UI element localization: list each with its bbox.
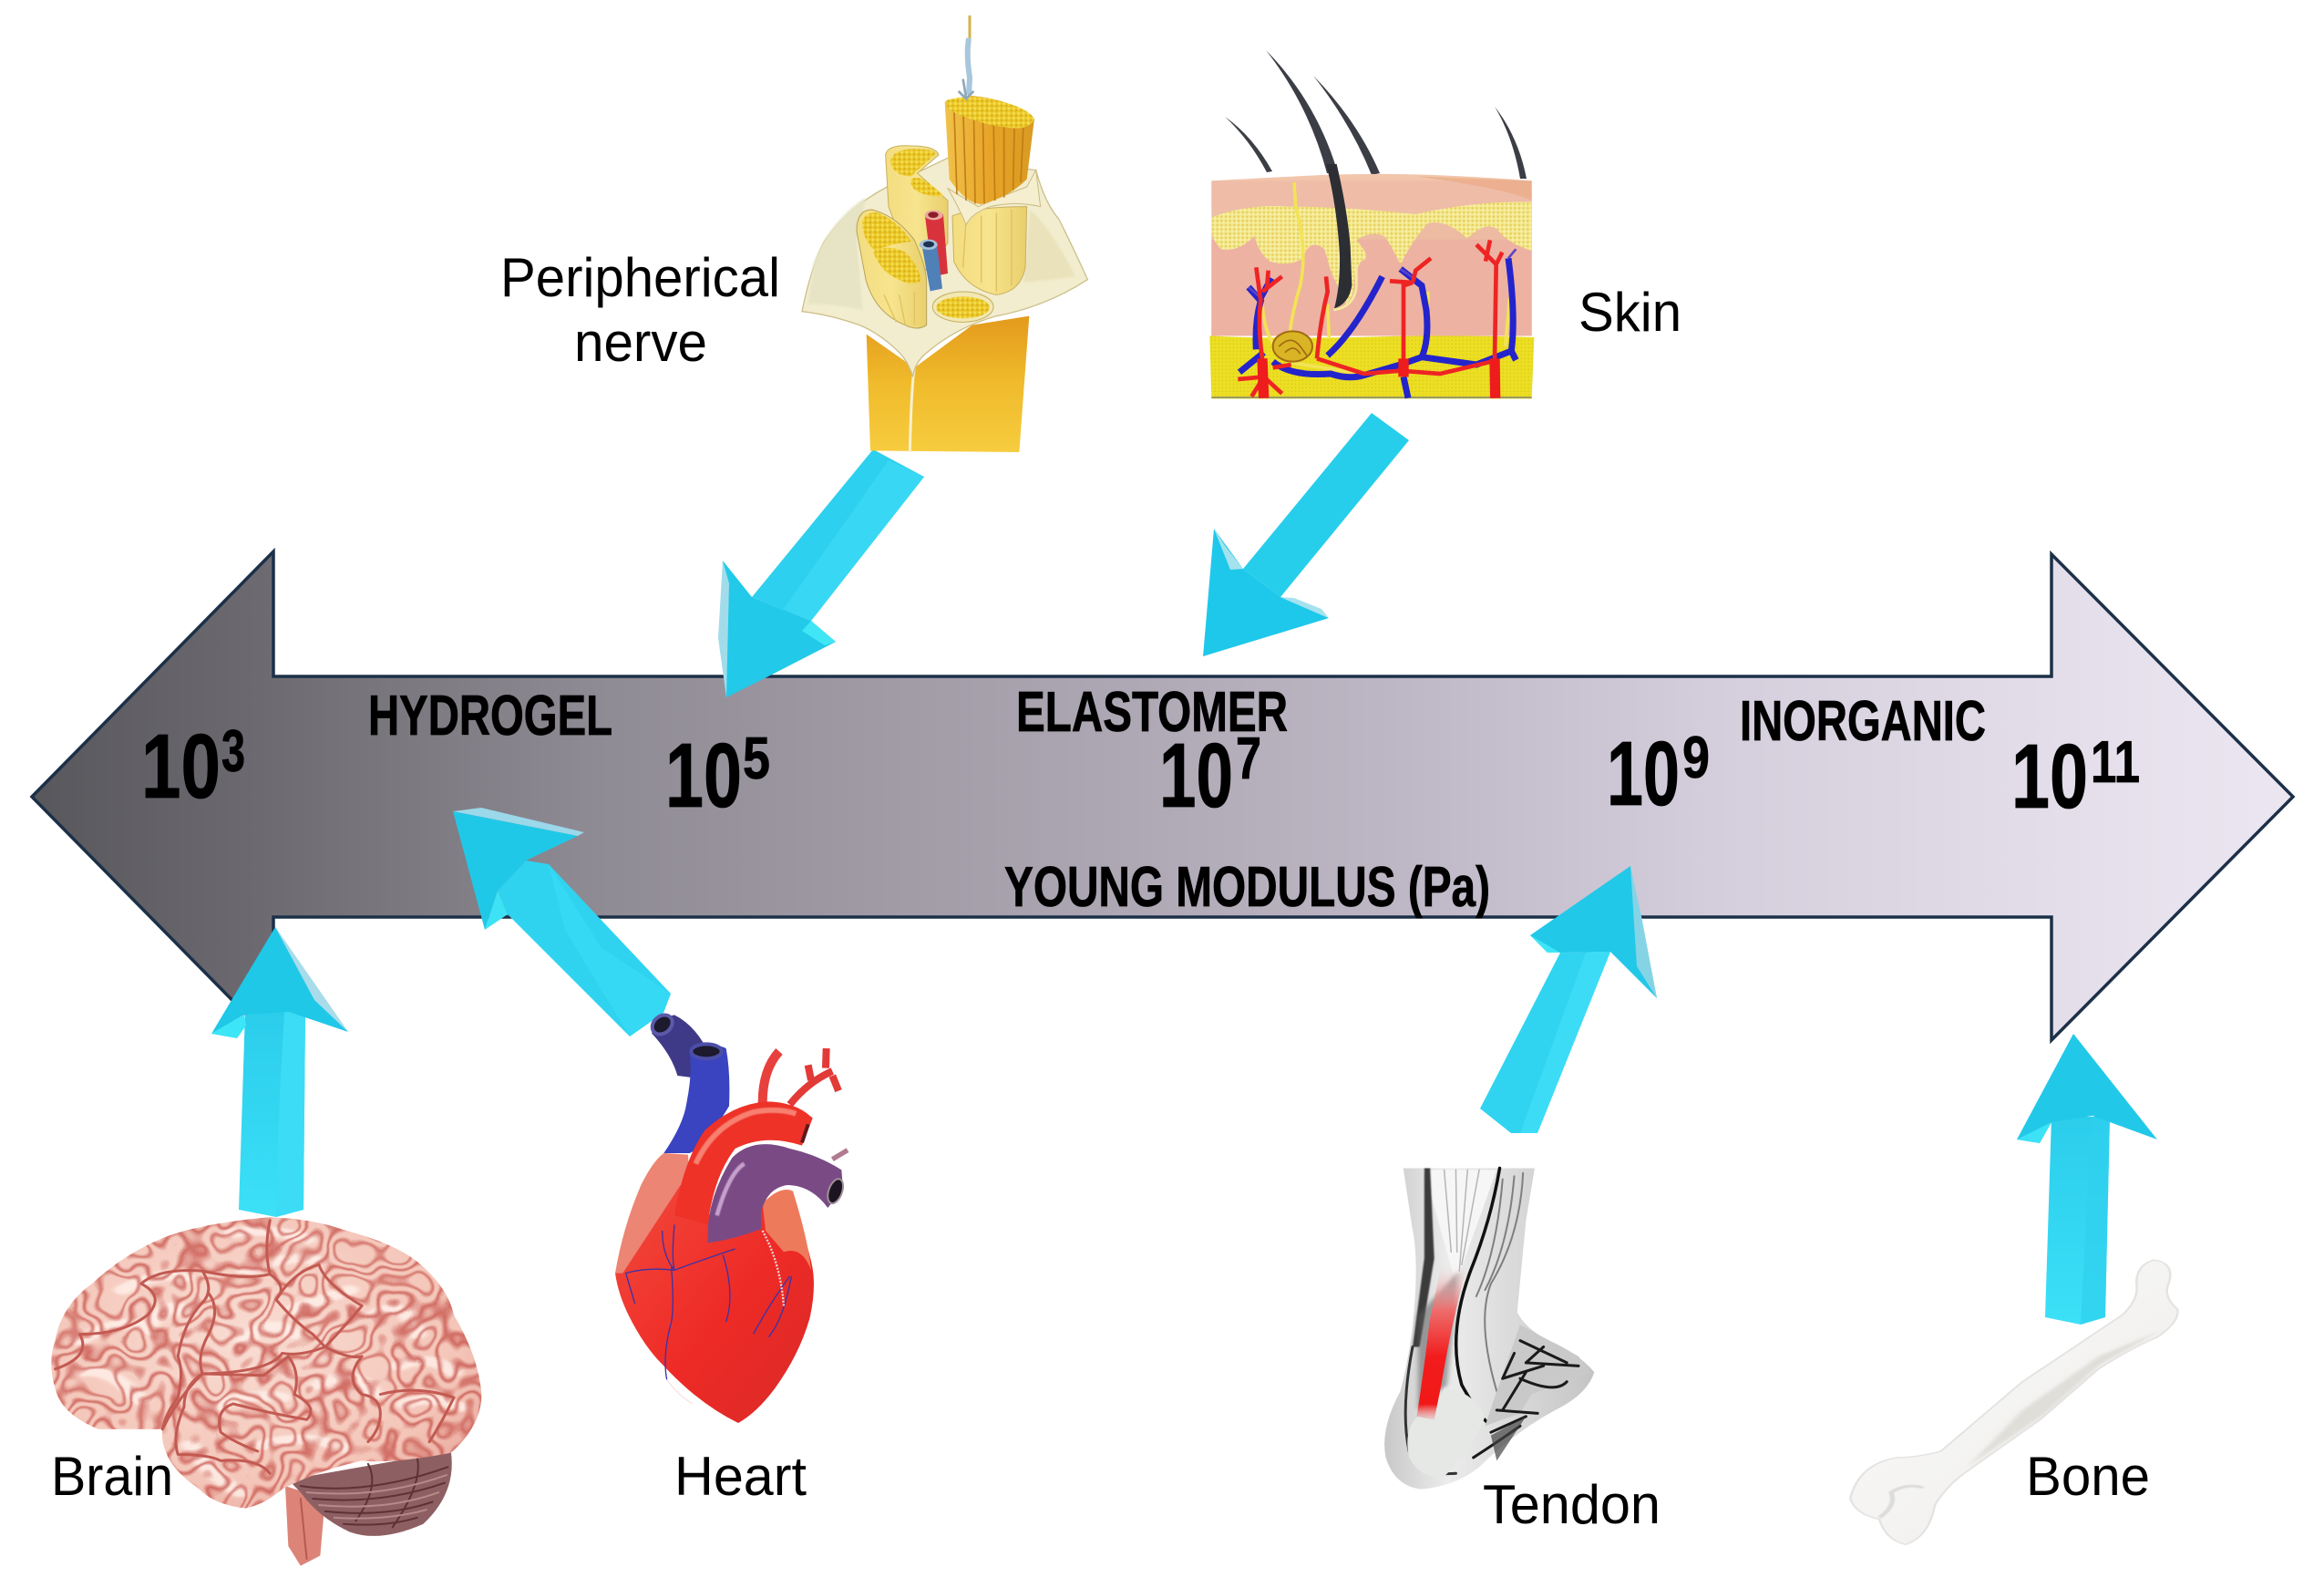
veins [1239, 258, 1516, 398]
scale value 10^11: 11 [2091, 728, 2140, 795]
label: peripherical nerve [500, 247, 780, 373]
scale value 10^7: 10 [1159, 725, 1233, 827]
scale value 10^5: 5 [743, 725, 770, 791]
upper left bundle [886, 146, 948, 271]
scale value 10^3: 3 [221, 717, 245, 784]
lower left bundle [857, 210, 927, 328]
ventricle body [615, 1185, 814, 1423]
small bundle [932, 292, 993, 322]
epineurium sheath [802, 158, 1087, 376]
arrow: heart to hydrogel range [453, 808, 671, 1036]
arrow: bone to 10^11 [2017, 1034, 2157, 1325]
right large bundle [952, 207, 1027, 294]
icon: brain [36, 1208, 503, 1566]
sulci [56, 1221, 454, 1473]
arteries [1238, 240, 1502, 398]
label: peripherical nerve: Peripherical [500, 247, 780, 308]
fine folds texture [51, 1217, 481, 1508]
left atrium side [615, 1153, 690, 1276]
label: skin: Skin [1578, 282, 1681, 343]
papillary yellow layer [1211, 201, 1532, 304]
tendon [1416, 1264, 1467, 1419]
cerebrum mass [51, 1217, 481, 1508]
label: young modulus axis: YOUNG MODULUS (Pa) [1004, 856, 1490, 919]
gyri highlights [80, 1231, 460, 1492]
icon: peripheral nerve [802, 15, 1087, 452]
foot silhouette [1384, 1169, 1594, 1490]
label: heart: Heart [674, 1446, 807, 1507]
cerebellum [288, 1451, 452, 1536]
icon: skin cross-section [1209, 50, 1534, 398]
arrow: peripheral nerve to 10^5 [718, 449, 924, 697]
label: peripherical nerve: nerve [574, 312, 707, 373]
main hair follicle [1326, 164, 1352, 308]
scale value 10^9: 9 [1682, 724, 1710, 790]
brainstem [285, 1486, 325, 1566]
calcaneus [1407, 1388, 1485, 1477]
sweat gland [1273, 331, 1312, 362]
top fibre bundle [945, 96, 1034, 204]
icon: bone [1850, 1260, 2177, 1544]
epidermis and dermis [1211, 174, 1532, 335]
coronary vessels [626, 1224, 791, 1379]
scale value 10^7: 7 [1236, 725, 1261, 791]
scale value 10^5: 10 [665, 725, 742, 827]
label: tendon: Tendon [1483, 1474, 1661, 1535]
label: hydrogel: HYDROGEL [368, 685, 612, 748]
small arteries [763, 1051, 779, 1103]
fascicle thread on top [968, 15, 970, 95]
hairs [1225, 50, 1527, 179]
arrow: skin to 10^7 [1203, 413, 1409, 656]
scale value 10^11: 10 [2011, 726, 2088, 828]
scale value 10^9: 10 [1607, 723, 1680, 825]
subcutaneous fat [1209, 335, 1534, 398]
pulmonary artery [708, 1144, 843, 1243]
muscle fibres [1424, 1170, 1496, 1284]
arrow: tendon to 10^9 [1480, 866, 1657, 1133]
nerve fibres [1262, 182, 1510, 374]
aorta arch [674, 1101, 813, 1224]
arrow: brain to 10^3 [211, 927, 348, 1217]
big gradient double arrow: Young modulus scale [32, 552, 2293, 1042]
label: brain: Brain [51, 1446, 173, 1507]
vein [922, 246, 942, 291]
dark shading behind tendon [1418, 1271, 1459, 1410]
label: elastomer: ELASTOMER [1016, 681, 1288, 744]
icon: heart [615, 1011, 848, 1423]
material class labels [368, 681, 1986, 919]
label: inorganic: INORGANIC [1740, 690, 1986, 753]
label: bone: Bone [2026, 1446, 2150, 1507]
nerve trunk [867, 316, 1029, 452]
artery [925, 214, 948, 276]
scale value 10^3: 10 [141, 716, 221, 818]
superior vena cava vessels [652, 1015, 704, 1078]
icon: foot and tendon [1384, 1169, 1594, 1490]
forefoot bones [1485, 1325, 1590, 1426]
